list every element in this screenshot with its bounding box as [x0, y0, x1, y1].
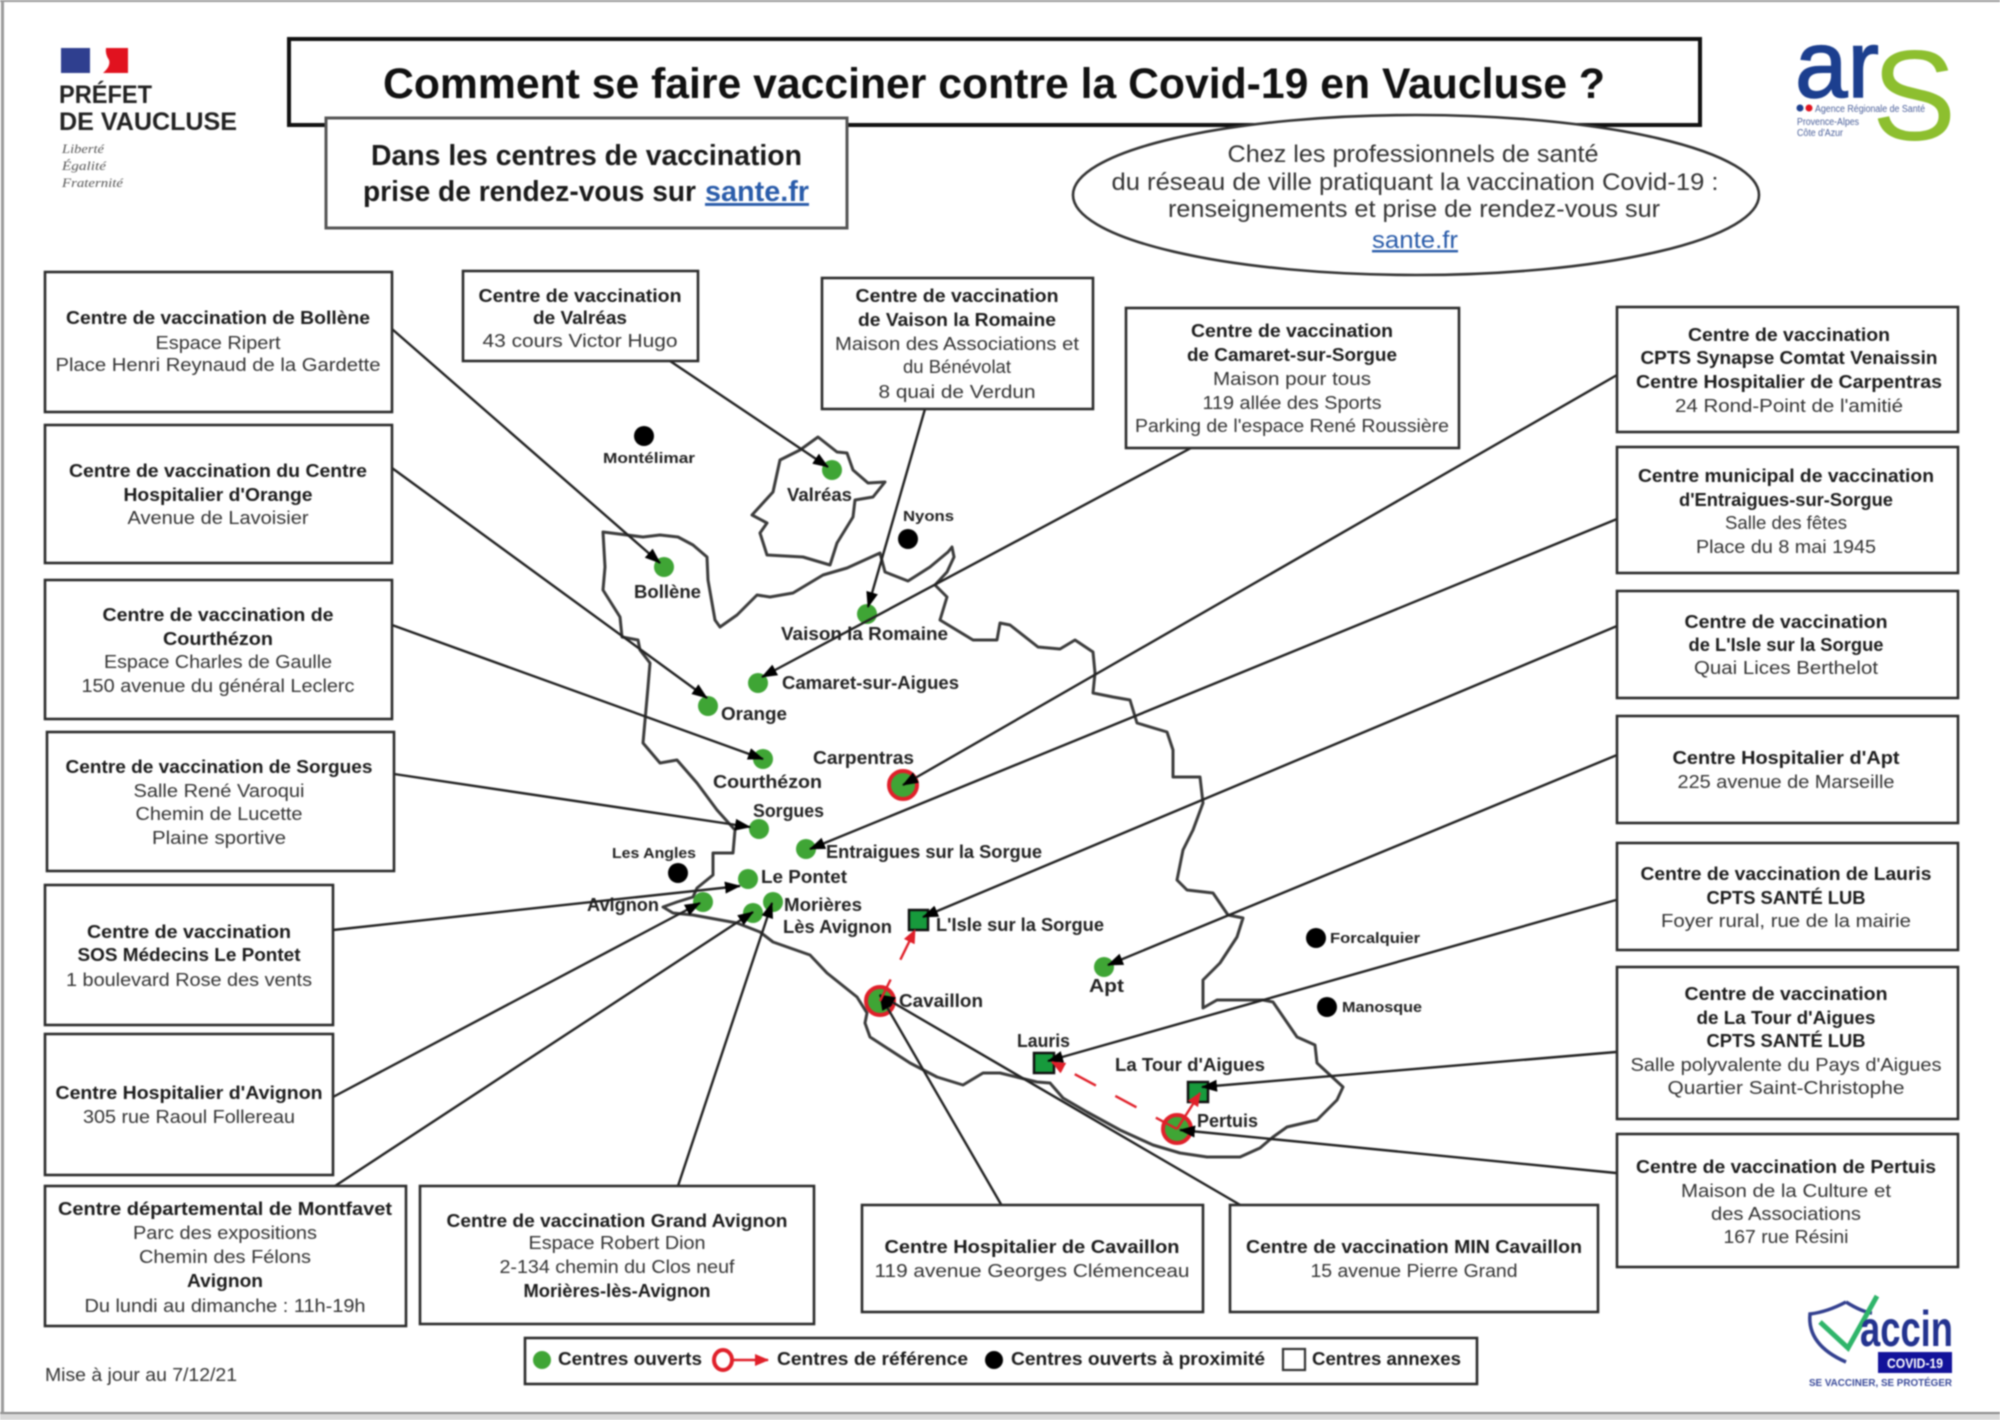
box: Sorgues: Plaine sportive [152, 828, 286, 848]
map place labels: Sorgues [753, 801, 824, 821]
box: Sorgues: Salle René Varoqui [134, 781, 304, 801]
box: Courthézon: 150 avenue du général Leclerc [82, 676, 354, 696]
logo: ARS: ar [1795, 11, 1879, 118]
box: Bollène [45, 272, 392, 412]
map place labels: Les Angles [612, 845, 696, 862]
box: Bollène: Place Henri Reynaud de la Gardette [56, 355, 380, 375]
box: Orange [45, 425, 392, 563]
markers: centres ouverts [654, 460, 1114, 977]
box: SOS Médecins Le Pontet: SOS Médecins Le Pontet [78, 945, 301, 965]
legend: Centres annexes [1312, 1349, 1461, 1369]
box: Apt: Centre Hospitalier d'Apt [1672, 748, 1900, 768]
map place labels: Le Pontet [761, 867, 847, 887]
box: MIN Cavaillon: Centre de vaccination MIN Cavaillon [1246, 1237, 1582, 1257]
box: MIN Cavaillon: 15 avenue Pierre Grand [1310, 1261, 1518, 1281]
box: Lauris [1617, 843, 1958, 950]
box: L'Isle sur la Sorgue: Centre de vaccination [1684, 612, 1888, 632]
logo: Vaccin Covid-19: COVID-19 [1887, 1355, 1943, 1371]
box: Camaret-sur-Sorgue [1126, 308, 1459, 448]
box: L'Isle sur la Sorgue [1617, 591, 1958, 698]
box: Carpentras: Centre Hospitalier de Carpentras [1636, 372, 1942, 392]
map place labels: Orange [721, 704, 787, 724]
box: Centre Hospitalier d'Avignon: 305 rue Raoul Follereau [83, 1107, 295, 1127]
map place labels: Entraigues sur la Sorgue [826, 842, 1042, 862]
box: Apt [1617, 716, 1958, 823]
markers: centres ouverts à proximité [634, 426, 1337, 1017]
box: Carpentras [1617, 307, 1958, 432]
box: Vaison la Romaine: de Vaison la Romaine [858, 310, 1056, 330]
box: La Tour d'Aigues: Centre de vaccination [1684, 984, 1888, 1004]
box: La Tour d'Aigues: CPTS SANTÉ LUB [1706, 1030, 1866, 1051]
box: Sorgues [47, 732, 394, 871]
box: Montfavet [45, 1186, 406, 1326]
panel: professionnels de santé: Chez les professionnels de santé [1228, 141, 1598, 168]
map place labels: La Tour d'Aigues [1115, 1055, 1265, 1075]
logo: ARS: Agence Régionale de Santé [1815, 104, 1925, 115]
panel: centres de vaccination: sante.fr [705, 176, 809, 208]
panel: professionnels de santé [1073, 115, 1759, 275]
logo: Préfet de Vaucluse [59, 48, 237, 190]
panel: centres de vaccination: Dans les centres de vaccination [371, 140, 802, 172]
update date: Mise à jour au 7/12/21 [45, 1365, 237, 1385]
panel: professionnels de santé: renseignements et prise de rendez-vous sur [1168, 196, 1660, 223]
map place labels: L'Isle sur la Sorgue [936, 915, 1104, 935]
box: Courthézon: Courthézon [163, 629, 273, 649]
markers: centres annexes [909, 910, 1208, 1102]
logo: Préfet de Vaucluse: Fraternité [61, 175, 124, 190]
legend: Centres ouverts [558, 1349, 702, 1369]
box: Montfavet: Parc des expositions [133, 1223, 317, 1243]
panel: professionnels de santé: du réseau de ville pratiquant la vaccination Covid-19 : [1112, 169, 1718, 196]
map: Valréas enclave [752, 437, 885, 565]
box: Vaison la Romaine: Maison des Associations et [835, 334, 1079, 354]
logo: Préfet de Vaucluse: Égalité [61, 158, 107, 173]
map place labels: Bollène [634, 582, 701, 602]
map place labels: Forcalquier [1330, 930, 1420, 947]
box: Camaret-sur-Sorgue: Centre de vaccination [1191, 321, 1393, 341]
box: Bollène: Centre de vaccination de Bollène [66, 308, 370, 328]
legend [525, 1338, 1477, 1384]
map place labels: Apt [1089, 976, 1124, 996]
box: Courthézon [45, 580, 392, 719]
map place labels: Vaison la Romaine [781, 624, 948, 644]
box: Montfavet: Chemin des Félons [139, 1247, 311, 1267]
box: Grand Avignon: Morières-lès-Avignon [524, 1281, 710, 1301]
box: Valréas: Centre de vaccination [478, 286, 682, 306]
box: Orange: Hospitalier d'Orange [124, 485, 312, 505]
map place labels: Valréas [787, 485, 852, 505]
logo: Préfet de Vaucluse: Liberté [61, 141, 105, 156]
logo: ARS: Côte d'Azur [1797, 128, 1844, 139]
box: L'Isle sur la Sorgue: Quai Lices Berthelot [1694, 658, 1878, 678]
box: L'Isle sur la Sorgue: de L'Isle sur la Sorgue [1688, 635, 1884, 655]
box: Centre Hospitalier de Cavaillon: Centre Hospitalier de Cavaillon [884, 1237, 1180, 1257]
box: La Tour d'Aigues: Quartier Saint-Christophe [1668, 1078, 1904, 1098]
box: SOS Médecins Le Pontet: Centre de vaccination [87, 922, 291, 942]
box: La Tour d'Aigues: de La Tour d'Aigues [1696, 1008, 1876, 1028]
box: Montfavet: Du lundi au dimanche : 11h-19h [84, 1296, 366, 1316]
box: Pertuis: Maison de la Culture et [1681, 1181, 1891, 1201]
logo: ARS [1795, 11, 1956, 168]
map place labels: Nyons [903, 508, 954, 525]
map place labels: Morières [784, 895, 862, 915]
legend: Centres de référence [777, 1349, 968, 1369]
map place labels: Camaret-sur-Aigues [782, 673, 959, 693]
box: Entraigues [1617, 447, 1958, 573]
box: Apt: 225 avenue de Marseille [1678, 772, 1894, 792]
box: Camaret-sur-Sorgue: Maison pour tous [1213, 369, 1371, 389]
map place labels: Lauris [1017, 1031, 1070, 1051]
box: Entraigues: Salle des fêtes [1725, 513, 1847, 533]
box: Camaret-sur-Sorgue: de Camaret-sur-Sorgue [1187, 345, 1397, 365]
box: Vaison la Romaine: 8 quai de Verdun [878, 382, 1036, 402]
box: Orange: Avenue de Lavoisier [128, 508, 308, 528]
box: Grand Avignon: Espace Robert Dion [528, 1233, 706, 1253]
box: SOS Médecins Le Pontet: 1 boulevard Rose des vents [66, 970, 312, 990]
logo: Préfet de Vaucluse: DE VAUCLUSE [59, 108, 237, 136]
map place labels [587, 450, 1422, 1131]
box: Pertuis [1617, 1134, 1958, 1267]
box: Sorgues: Centre de vaccination de Sorgues [66, 757, 372, 777]
map place labels: Lès Avignon [783, 917, 892, 937]
box: Entraigues: Centre municipal de vaccination [1638, 466, 1934, 486]
box: Vaison la Romaine: du Bénévolat [903, 357, 1011, 377]
box: Camaret-sur-Sorgue: Parking de l'espace René Roussière [1135, 416, 1449, 436]
red dashed arrows [880, 930, 1200, 1129]
box: La Tour d'Aigues: Salle polyvalente du Pays d'Aigues [1630, 1055, 1942, 1075]
map place labels: Courthézon [713, 772, 822, 792]
box: Camaret-sur-Sorgue: 119 allée des Sports [1202, 393, 1382, 413]
box: Pertuis: des Associations [1711, 1204, 1861, 1224]
box: Centre Hospitalier de Cavaillon [862, 1205, 1203, 1312]
box: La Tour d'Aigues [1617, 967, 1958, 1119]
logo: Préfet de Vaucluse: PRÉFET [59, 80, 152, 109]
map place labels: Montélimar [603, 450, 695, 467]
box: Courthézon: Espace Charles de Gaulle [104, 652, 332, 672]
box: Entraigues: d'Entraigues-sur-Sorgue [1679, 490, 1893, 510]
box: Lauris: CPTS SANTÉ LUB [1706, 887, 1866, 908]
box: Grand Avignon: 2-134 chemin du Clos neuf [500, 1257, 736, 1277]
box: Lauris: Foyer rural, rue de la mairie [1661, 911, 1911, 931]
box: Pertuis: Centre de vaccination de Pertuis [1636, 1157, 1936, 1177]
box: Montfavet: Avignon [187, 1271, 263, 1291]
box: MIN Cavaillon [1230, 1205, 1598, 1312]
box: Centre Hospitalier d'Avignon: Centre Hospitalier d'Avignon [56, 1083, 322, 1103]
box: Carpentras: CPTS Synapse Comtat Venaissin [1640, 348, 1938, 368]
box: Entraigues: Place du 8 mai 1945 [1696, 537, 1876, 557]
legend: Centres ouverts à proximité [1011, 1349, 1265, 1369]
map place labels: Pertuis [1197, 1111, 1258, 1131]
logo: Vaccin Covid-19: accin [1860, 1301, 1953, 1357]
map place labels: Carpentras [813, 748, 914, 768]
panel: centres de vaccination [326, 118, 847, 228]
box: Valréas: de Valréas [533, 308, 627, 328]
box: Centre Hospitalier de Cavaillon: 119 avenue Georges Clémenceau [874, 1261, 1190, 1281]
box: Bollène: Espace Ripert [156, 333, 280, 353]
box: SOS Médecins Le Pontet [45, 885, 333, 1025]
map: Vaucluse outline [603, 437, 1343, 1157]
logo: Vaccin Covid-19: SE VACCINER, SE PROTÉGER [1809, 1376, 1953, 1389]
box: Grand Avignon: Centre de vaccination Grand Avignon [446, 1211, 788, 1231]
box: Montfavet: Centre départemental de Montfavet [58, 1199, 392, 1219]
title: Comment se faire vacciner contre la Covid-19 en Vaucluse ? [383, 60, 1605, 108]
box: Courthézon: Centre de vaccination de [102, 605, 334, 625]
box: Carpentras: Centre de vaccination [1688, 325, 1890, 345]
box: Vaison la Romaine: Centre de vaccination [856, 286, 1058, 306]
map place labels: Cavaillon [899, 991, 983, 1011]
title [289, 39, 1700, 125]
box: Lauris: Centre de vaccination de Lauris [1640, 864, 1932, 884]
markers: centres de référence [866, 771, 1191, 1143]
map place labels: Manosque [1342, 999, 1422, 1016]
logo: ARS: S [1872, 25, 1956, 168]
box: Orange: Centre de vaccination du Centre [69, 461, 367, 481]
map place labels: Avignon [587, 895, 659, 915]
logo: ARS: Provence-Alpes [1797, 117, 1859, 128]
box: Vaison la Romaine [822, 278, 1093, 409]
box: Carpentras: 24 Rond-Point de l'amitié [1675, 396, 1903, 416]
box: Valréas [463, 271, 698, 361]
box: Centre Hospitalier d'Avignon [45, 1034, 333, 1175]
leader arrows [333, 329, 1617, 1206]
box: Pertuis: 167 rue Résini [1724, 1227, 1848, 1247]
box: Valréas: 43 cours Victor Hugo [482, 331, 678, 351]
box: Grand Avignon [420, 1186, 814, 1324]
logo: Vaccin Covid-19 [1809, 1296, 1953, 1389]
box: Sorgues: Chemin de Lucette [136, 804, 302, 824]
panel: professionnels de santé: sante.fr [1372, 227, 1458, 254]
panel: centres de vaccination: prise de rendez-vous sur [363, 176, 696, 208]
